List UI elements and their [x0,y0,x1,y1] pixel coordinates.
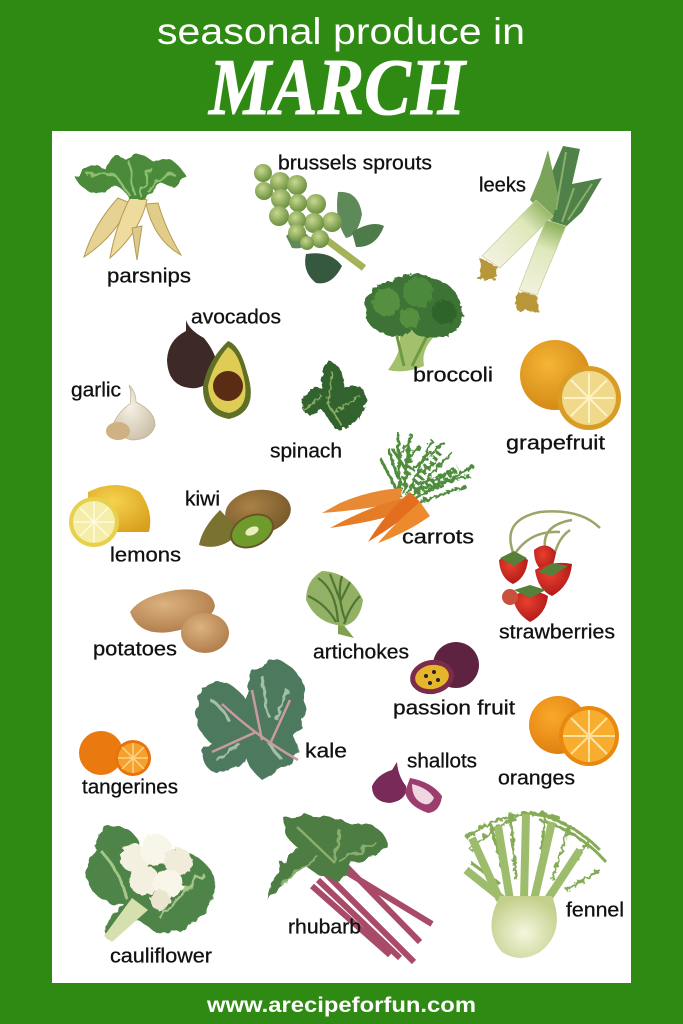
label: brussels sprouts: brussels sprouts [278,152,432,174]
label: rhubarb: rhubarb [288,916,361,938]
label: shallots: shallots [407,750,477,772]
label: broccoli: broccoli [413,364,493,386]
label: fennel: fennel [566,900,624,922]
icon: spinach [303,361,367,430]
icon: artichokes [306,571,363,638]
label: lemons: lemons [110,544,181,566]
label: oranges: oranges [498,768,575,790]
icon: shallots [372,762,442,813]
label: cauliflower: cauliflower [110,946,212,968]
icon: strawberries [499,511,600,622]
icon: potatoes [130,589,229,653]
icon: broccoli [365,274,463,371]
title: seasonal produce in: seasonal produce in [157,11,525,52]
icon: fennel [466,812,606,958]
label: spinach: spinach [270,440,342,462]
label: carrots: carrots [402,526,474,548]
icon: brussels sprouts [254,164,384,283]
icon: oranges [529,696,619,766]
icon: rhubarb [268,815,432,962]
icon: grapefruit [520,340,621,430]
label: potatoes: potatoes [93,638,177,660]
footer: website: www.arecipeforfun.com [206,994,476,1017]
icon: passion fruit [407,642,479,698]
icon: tangerines [79,731,151,776]
icon: carrots [322,432,474,543]
label: passion fruit: passion fruit [393,698,515,720]
icon: parsnips [76,154,186,260]
label: tangerines: tangerines [82,776,178,798]
icon: lemons [69,485,150,547]
label: artichokes: artichokes [313,642,409,664]
label: parsnips: parsnips [107,266,191,288]
label: avocados: avocados [191,306,281,328]
icon: avocados [167,320,251,419]
icon: garlic [106,385,155,440]
label: kiwi: kiwi [185,488,220,510]
label: kale: kale [305,740,347,762]
panel: produce sheet [52,131,631,983]
icon: cauliflower [86,826,216,942]
label: grapefruit: grapefruit [506,432,606,454]
icon: kiwi [199,486,294,554]
icon: leeks [478,146,602,312]
label: strawberries: strawberries [499,622,615,644]
label: garlic: garlic [71,380,121,402]
label: leeks: leeks [479,174,526,196]
title: March: MARCH [207,44,467,132]
icon: kale [196,660,305,780]
